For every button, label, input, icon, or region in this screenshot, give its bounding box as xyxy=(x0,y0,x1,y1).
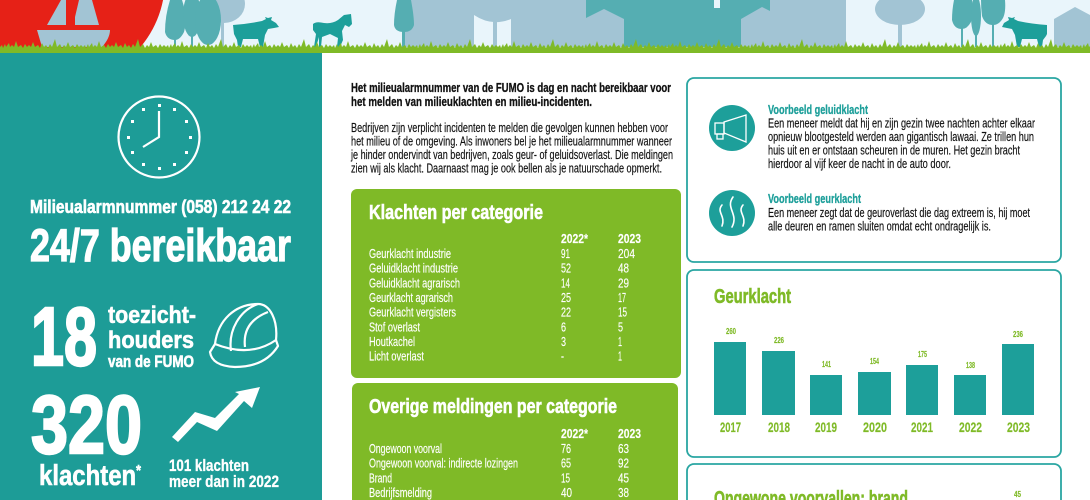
table: 2022* xyxy=(561,232,588,246)
stat label: toezichthouders: toezicht- xyxy=(108,302,196,329)
grass strip xyxy=(0,36,1090,53)
table: Geurklacht vergisters xyxy=(369,306,456,320)
table: 76 xyxy=(561,442,571,456)
intro body text: het milieu of de omgeving. Als inwoners bel je het milieualarmnummer wanneer xyxy=(351,134,672,148)
bar chart: 260 xyxy=(726,327,736,336)
bar chart: 2019 xyxy=(815,420,837,435)
table: Geluidklacht industrie xyxy=(369,262,458,276)
house right xyxy=(1054,7,1090,47)
table: 1 xyxy=(618,335,622,349)
stat: 18: 18 xyxy=(31,290,97,383)
bar chart: 2021 xyxy=(911,420,933,435)
table: 2022* xyxy=(561,427,588,441)
stat label: toezichthouders xyxy=(108,302,196,371)
table: 2023 xyxy=(618,232,641,246)
table: 1 xyxy=(618,350,622,364)
table: Geluidklacht agrarisch xyxy=(369,276,460,290)
teal trees right xyxy=(952,0,1005,47)
table: 29 xyxy=(618,276,629,290)
heading: Overige meldingen per categorie xyxy=(369,396,617,418)
bar chart: 154 xyxy=(870,357,879,366)
table: 17 xyxy=(618,291,626,305)
bar chart: 236 xyxy=(1013,330,1023,339)
table: 14 xyxy=(561,276,570,290)
heading: Geurklacht xyxy=(714,286,791,308)
24/7 heading: 24/7 bereikbaar xyxy=(30,220,291,271)
table: 48 xyxy=(618,262,629,276)
intro bold text: het melden van milieuklachten en milieu-incidenten. xyxy=(351,95,592,109)
table: 6 xyxy=(561,320,566,334)
panel: overige meldingen per categorie xyxy=(352,383,678,500)
table: 65 xyxy=(561,457,571,471)
table: Ongewoon voorval xyxy=(369,442,442,456)
intro body text: Bedrijven zijn verplicht incidenten te melden die gevolgen kunnen hebben voor xyxy=(351,121,668,135)
table: Houtkachel xyxy=(369,335,415,349)
example: geurklacht xyxy=(768,192,1030,234)
example: geluidklacht: Voorbeeld geluidklacht xyxy=(768,103,869,117)
icon: sailing boat xyxy=(37,0,110,47)
table: 52 xyxy=(561,262,571,276)
header landscape illustration xyxy=(0,0,1090,84)
bar chart: 2020 xyxy=(863,420,887,435)
example: geluidklacht xyxy=(768,103,1035,171)
table: Licht overlast xyxy=(369,350,424,364)
bar chart: 2018 xyxy=(768,420,790,435)
intro body text: zien wij als klacht. Daarnaast mag je ook bellen als je natuurschade opmerkt. xyxy=(351,162,662,176)
table: 22 xyxy=(561,306,571,320)
bar chart: 138 xyxy=(966,361,975,370)
table: 40 xyxy=(561,486,572,500)
stat note xyxy=(169,457,279,491)
stat label: klachten: * xyxy=(136,462,141,479)
table: 204 xyxy=(618,247,635,261)
background tree xyxy=(203,0,245,47)
intro body text xyxy=(350,121,673,176)
table: 15 xyxy=(618,306,627,320)
table: 15 xyxy=(561,471,570,485)
teal trees left xyxy=(165,0,221,47)
table: 3 xyxy=(561,335,566,349)
icon: horse xyxy=(313,14,352,47)
table: 38 xyxy=(618,486,629,500)
table xyxy=(369,232,641,364)
icon: rising arrow xyxy=(172,387,260,442)
bar chart: 2023 xyxy=(1007,420,1030,435)
example: geurklacht: alle deuren en ramen sluiten omdat echt ondragelijk is. xyxy=(768,220,991,234)
stat: 320: 320 xyxy=(31,378,142,471)
stat note: 101 klachten xyxy=(169,457,249,475)
panel: klachten per categorie xyxy=(351,189,681,378)
icon: cow right xyxy=(1002,17,1047,47)
panel: key figures xyxy=(0,53,322,500)
table: Brand xyxy=(369,471,392,485)
intro body text: je hinder ondervindt van bedrijven, zoals geur- of geluidsoverlast. Die meldingen xyxy=(350,148,673,162)
heading: Klachten per categorie xyxy=(369,202,543,224)
table: Stof overlast xyxy=(369,320,420,334)
table: 25 xyxy=(561,291,571,305)
bar chart xyxy=(714,327,1034,435)
example: geurklacht: Voorbeeld geurklacht xyxy=(768,192,862,206)
icon: megaphone xyxy=(709,105,755,151)
table: 5 xyxy=(618,320,623,334)
blue tree right xyxy=(875,0,925,47)
panel: voorbeelden xyxy=(687,78,1061,262)
table: Geurklacht industrie xyxy=(369,247,451,261)
icon: clock xyxy=(118,96,200,178)
table xyxy=(369,427,641,500)
bar chart: 2017 xyxy=(720,420,741,435)
table: Geurklacht agrarisch xyxy=(369,291,453,305)
red sun circle xyxy=(0,0,165,84)
chart value: 45 xyxy=(1014,490,1021,499)
stat note: meer dan in 2022 xyxy=(169,473,279,491)
table: 45 xyxy=(618,471,629,485)
table: 2023 xyxy=(618,427,641,441)
buildings skyline xyxy=(405,0,846,47)
icon: helmet xyxy=(210,304,278,367)
stat label: toezichthouders: van de FUMO xyxy=(108,352,194,371)
icon: odour waves xyxy=(709,190,755,236)
bar chart: 175 xyxy=(918,350,927,359)
panel: ongewone voorvallen brand xyxy=(687,464,1061,500)
bar chart: 226 xyxy=(774,336,784,345)
stat label: klachten: klachten xyxy=(39,460,157,492)
panel: geurklacht chart xyxy=(687,270,1061,457)
example: geluidklacht: hierdoor al vijf keer de nacht in de auto door. xyxy=(768,157,951,171)
tree at centre xyxy=(394,0,414,47)
phone number: Milieualarmnummer (058) 212 24 22 xyxy=(30,197,291,217)
table: Ongewoon voorval: indirecte lozingen xyxy=(369,457,518,471)
bar chart: 2022 xyxy=(959,420,982,435)
intro bold text xyxy=(351,81,671,109)
bar chart: 141 xyxy=(822,360,831,369)
table: 91 xyxy=(561,247,570,261)
table: - xyxy=(561,350,564,364)
icon: cow xyxy=(233,17,279,47)
table: 63 xyxy=(618,442,629,456)
stat label: toezichthouders: houders xyxy=(108,327,194,354)
table: Bedrijfsmelding xyxy=(369,486,432,500)
intro bold text: Het milieualarmnummer van de FUMO is dag en nacht bereikbaar voor xyxy=(351,81,671,95)
table: 92 xyxy=(618,457,629,471)
